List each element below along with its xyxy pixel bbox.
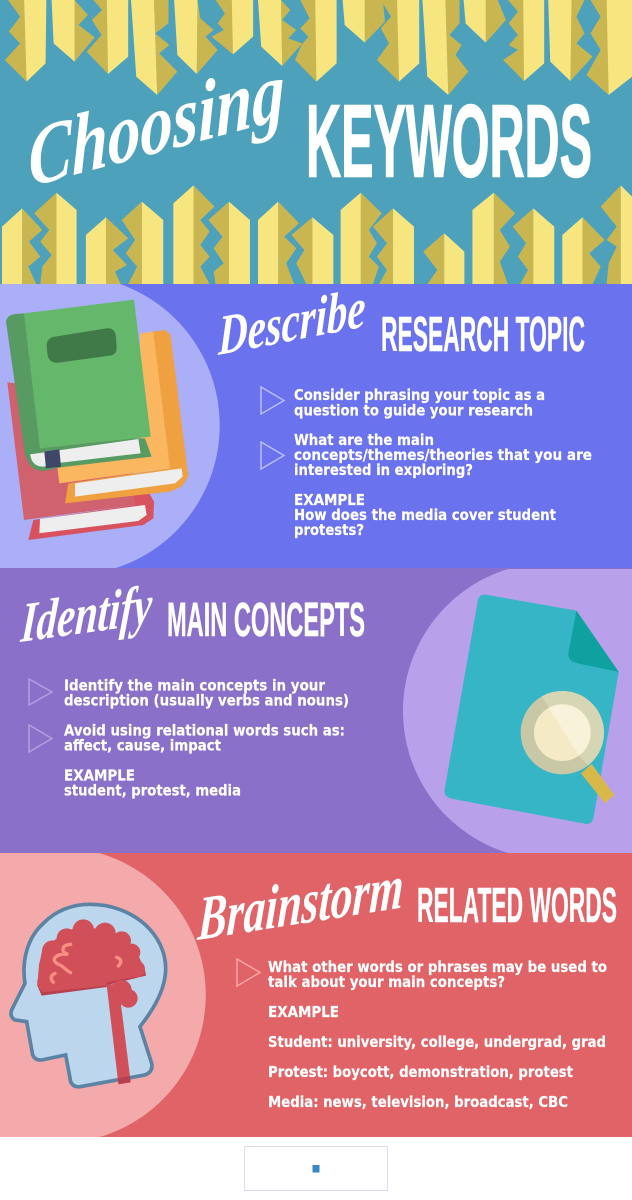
- text block: themes advice: interested in exploring?: [294, 461, 473, 479]
- text block: themes advice: What are the main: [294, 431, 434, 449]
- text block: example: [64, 766, 241, 800]
- text block: example word lists: Protest: boycott, demonstration, protest: [268, 1063, 573, 1081]
- heading: identify main concepts: [18, 574, 365, 655]
- text block: example: student, protest, media: [64, 782, 241, 800]
- icon: document: [444, 595, 619, 824]
- text block: themes advice: [294, 431, 592, 479]
- icon: triangle bullet: [237, 959, 260, 986]
- heading: identify main concepts: Identify: [18, 574, 155, 655]
- decorative top pencil spikes: [5, 0, 632, 95]
- heading: brainstorm related words: [196, 851, 617, 954]
- text block: identify concepts advice: description (usually verbs and nouns): [64, 692, 349, 710]
- text block: relational words advice: affect, cause, impact: [64, 736, 221, 754]
- panel: brainstorm related words: [0, 851, 632, 1137]
- text block: example: [294, 491, 556, 539]
- icon: triangle bullet: [29, 725, 52, 752]
- text block: question advice: [294, 386, 545, 420]
- text block: example: EXAMPLE: [64, 766, 135, 784]
- text block: relational words advice: Avoid using relational words such as:: [64, 722, 345, 740]
- icon: stack of books: [6, 300, 188, 540]
- text block: example word lists: EXAMPLE: [268, 1003, 339, 1021]
- icon: triangle bullet: [261, 387, 284, 414]
- text block: example: EXAMPLE: [294, 491, 365, 509]
- footer: broken image placeholder: [244, 1146, 388, 1190]
- text block: identify concepts advice: [64, 676, 349, 710]
- text block: example word lists: [268, 1003, 606, 1111]
- text block: relational words advice: [64, 722, 345, 754]
- text block: example word lists: Media: news, television, broadcast, CBC: [268, 1093, 568, 1111]
- icon: head with brain: [11, 904, 166, 1087]
- title: Choosing: [28, 42, 285, 206]
- icon: triangle bullet: [29, 679, 52, 705]
- text block: brainstorm question: [268, 958, 607, 991]
- title: [28, 42, 592, 206]
- text block: identify concepts advice: Identify the main concepts in your: [64, 676, 326, 694]
- decorative bottom pencil spikes: [2, 185, 632, 284]
- heading: describe research topic: Describe: [217, 277, 366, 368]
- text block: question advice: question to guide your research: [294, 402, 533, 420]
- heading: brainstorm related words: Brainstorm: [196, 851, 405, 954]
- panel: identify main concepts: MAIN CONCEPTS: [167, 594, 365, 647]
- panel: title banner: [0, 0, 632, 285]
- text block: example: How does the media cover student: [294, 506, 556, 524]
- heading: describe research topic: [217, 277, 585, 368]
- icon: magnifier: [521, 691, 614, 803]
- icon: triangle bullet: [261, 442, 284, 469]
- text block: question advice: Consider phrasing your topic as a: [294, 386, 545, 404]
- panel: describe research topic: [0, 277, 632, 569]
- text block: brainstorm question: talk about your main concepts?: [268, 973, 505, 991]
- panel: identify main concepts: [0, 568, 632, 853]
- text block: example: protests?: [294, 521, 364, 539]
- text block: themes advice: concepts/themes/theories that you are: [294, 446, 592, 464]
